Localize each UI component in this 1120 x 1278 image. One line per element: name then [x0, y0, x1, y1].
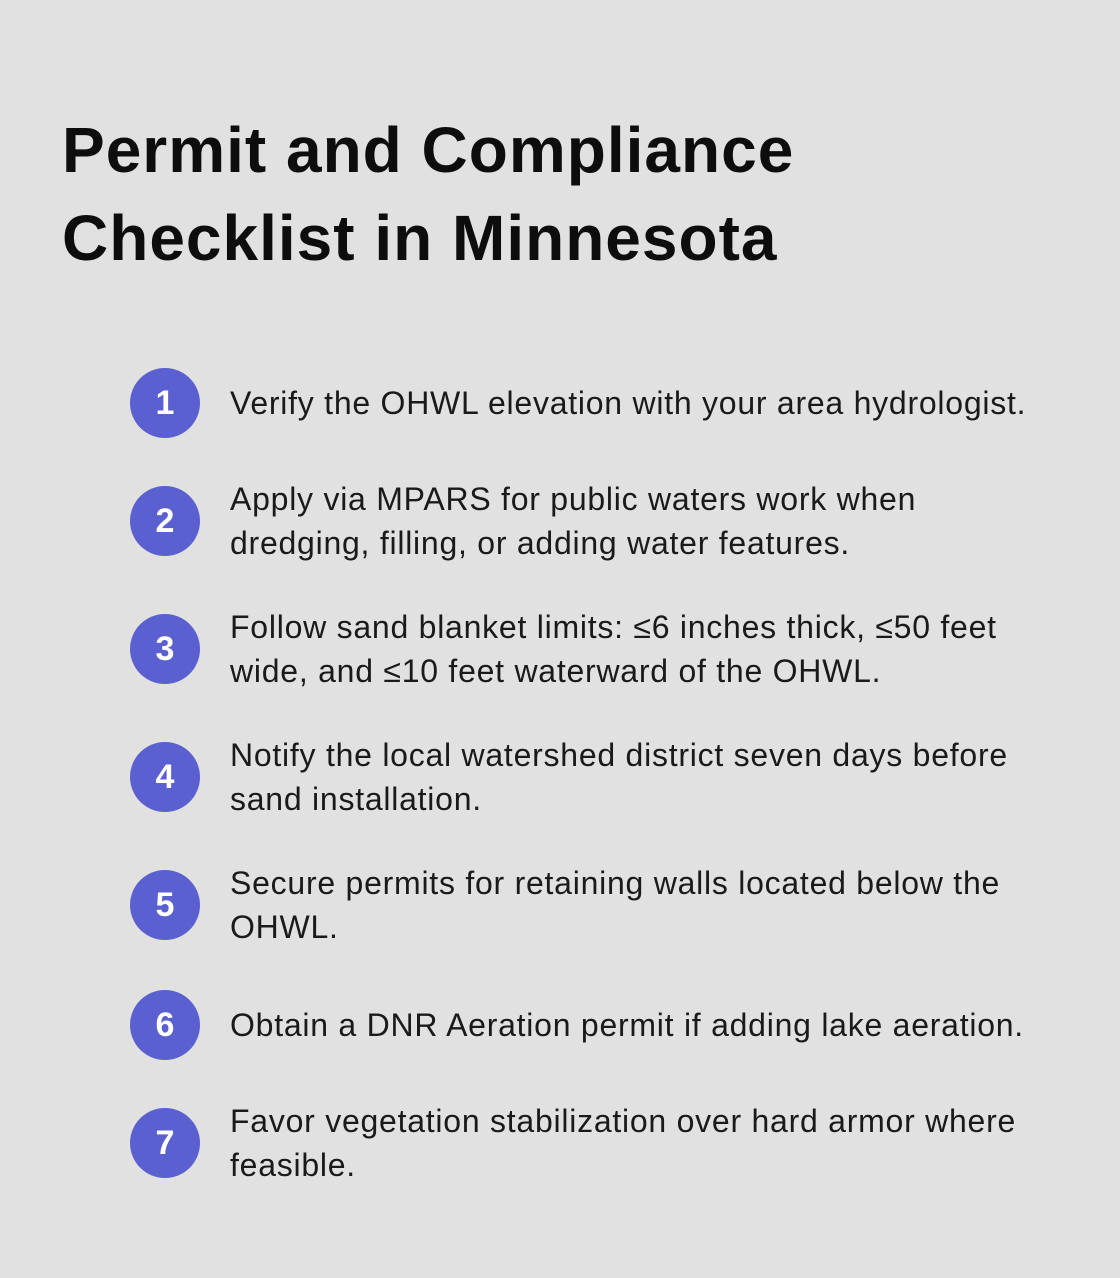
item text 7: Favor vegetation stabilization over hard armor where — [230, 1103, 1016, 1139]
number badge 1 — [130, 368, 200, 438]
number badge 6: 6 — [156, 1006, 174, 1044]
item text 6: Obtain a DNR Aeration permit if adding lake aeration. — [230, 1007, 1024, 1043]
checklist item 4 — [130, 737, 1008, 817]
title: Checklist in Minnesota — [62, 202, 777, 274]
title — [62, 114, 794, 274]
checklist item 7 — [130, 1103, 1016, 1183]
number badge 4 — [130, 742, 200, 812]
item text 4: sand installation. — [230, 781, 482, 817]
item text 3 — [230, 609, 997, 689]
title: Permit and Compliance — [62, 114, 794, 186]
item text 7: feasible. — [230, 1147, 356, 1183]
item text 5 — [230, 865, 1000, 945]
number badge 7 — [130, 1108, 200, 1178]
number badge 3 — [130, 614, 200, 684]
number badge 5 — [130, 870, 200, 940]
checklist item 3 — [130, 609, 997, 689]
item text 2 — [230, 481, 916, 561]
item text 2: dredging, filling, or adding water features. — [230, 525, 850, 561]
item text 7 — [230, 1103, 1016, 1183]
checklist item 6 — [130, 990, 1024, 1060]
number badge 4: 4 — [156, 758, 174, 796]
number badge 1: 1 — [156, 384, 174, 422]
item text 3: wide, and ≤10 feet waterward of the OHWL. — [230, 653, 881, 689]
number badge 7: 7 — [156, 1124, 174, 1162]
checklist item 1 — [130, 368, 1026, 438]
item text 5: Secure permits for retaining walls located below the — [230, 865, 1000, 901]
number badge 6 — [130, 990, 200, 1060]
number badge 3: 3 — [156, 630, 174, 668]
checklist item 2 — [130, 481, 916, 561]
number badge 2: 2 — [156, 502, 174, 540]
item text 5: OHWL. — [230, 909, 339, 945]
item text 1: Verify the OHWL elevation with your area hydrologist. — [230, 385, 1026, 421]
number badge 5: 5 — [156, 886, 174, 924]
item text 4: Notify the local watershed district seven days before — [230, 737, 1008, 773]
number badge 2 — [130, 486, 200, 556]
item text 2: Apply via MPARS for public waters work when — [230, 481, 916, 517]
checklist item 5 — [130, 865, 1000, 945]
item text 4 — [230, 737, 1008, 817]
item text 3: Follow sand blanket limits: ≤6 inches thick, ≤50 feet — [230, 609, 997, 645]
